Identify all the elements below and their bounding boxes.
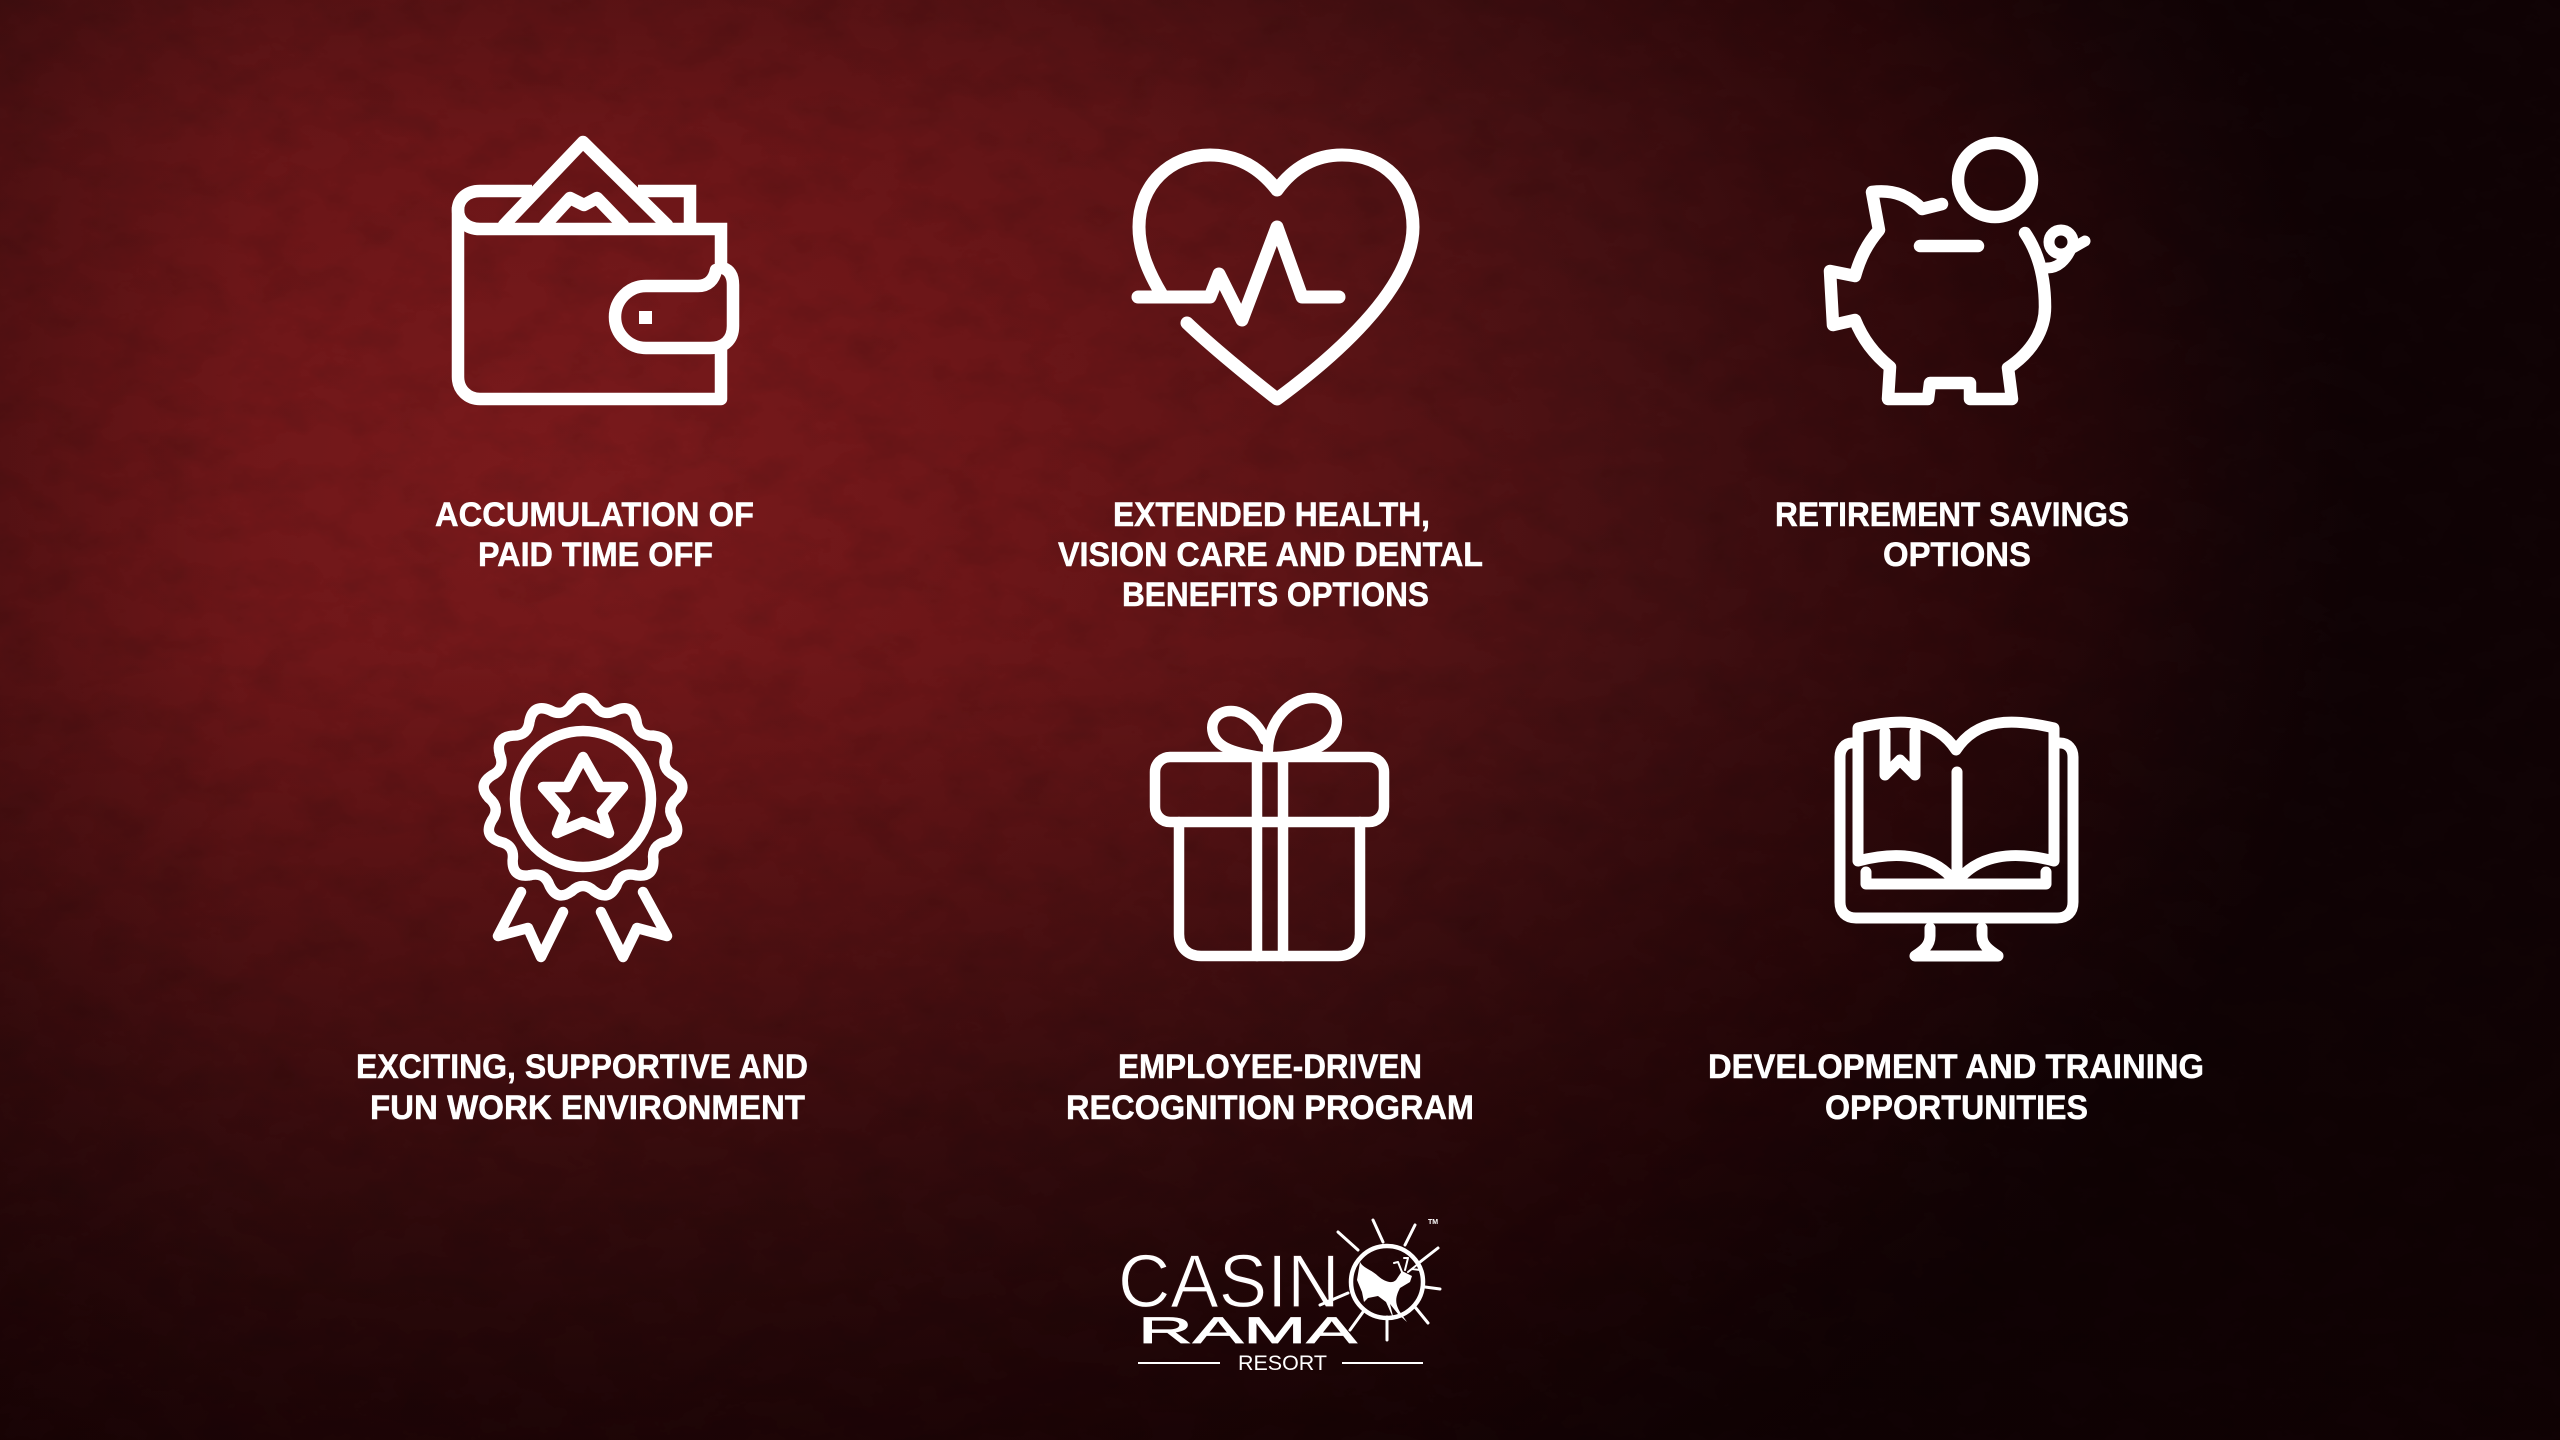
label: recognition program: EMPLOYEE-DRIVEN: [1118, 1048, 1422, 1086]
logo ring: letter O with spikes and deer: [1320, 1220, 1440, 1340]
panel: development and training: [1708, 722, 2204, 1127]
label: development and training: [1708, 1048, 2204, 1127]
label: paid time off: PAID TIME OFF: [478, 536, 713, 574]
label: health benefits: BENEFITS OPTIONS: [1122, 576, 1429, 614]
logo divider lines: [1138, 1362, 1423, 1364]
label: retirement savings: RETIREMENT SAVINGS: [1775, 496, 2129, 534]
label: paid time off: [435, 496, 754, 574]
panel: paid time off: [435, 142, 754, 574]
panel: retirement savings: [1775, 143, 2129, 574]
panel: health benefits: [1058, 155, 1483, 614]
panel: recognition program: [1066, 698, 1474, 1127]
logo wordmark: CASINO: [1118, 1239, 1396, 1323]
icon: piggy bank with coin: [1830, 143, 2085, 399]
logo wordmark: RESORT: [1238, 1351, 1327, 1375]
label: work environment: [356, 1048, 808, 1127]
logo wordmark: RAMA: [1138, 1310, 1358, 1351]
icon: gift box: [1155, 698, 1384, 956]
panel: work environment: [356, 694, 808, 1127]
label: development and training: DEVELOPMENT AND TRAINING: [1708, 1048, 2204, 1086]
label: paid time off: ACCUMULATION OF: [435, 496, 754, 534]
logo wordmark: [1118, 1219, 1438, 1375]
label: recognition program: [1066, 1048, 1474, 1127]
logo: Casino Rama Resort: [1118, 1219, 1440, 1375]
icon: heart with pulse: [1138, 155, 1413, 399]
label: retirement savings: OPTIONS: [1883, 536, 2031, 574]
label: retirement savings: [1775, 496, 2129, 574]
label: recognition program: RECOGNITION PROGRAM: [1066, 1089, 1474, 1127]
label: work environment: FUN WORK ENVIRONMENT: [370, 1089, 805, 1127]
label: health benefits: EXTENDED HEALTH,: [1113, 496, 1430, 534]
logo wordmark: TM: [1428, 1219, 1438, 1226]
label: development and training: OPPORTUNITIES: [1825, 1089, 2088, 1127]
label: work environment: EXCITING, SUPPORTIVE AND: [356, 1048, 808, 1086]
icon: wallet: [458, 142, 733, 399]
label: health benefits: VISION CARE AND DENTAL: [1058, 536, 1483, 574]
icon: book on monitor: [1840, 722, 2073, 956]
label: health benefits: [1058, 496, 1483, 614]
icon: award rosette: [478, 694, 686, 957]
